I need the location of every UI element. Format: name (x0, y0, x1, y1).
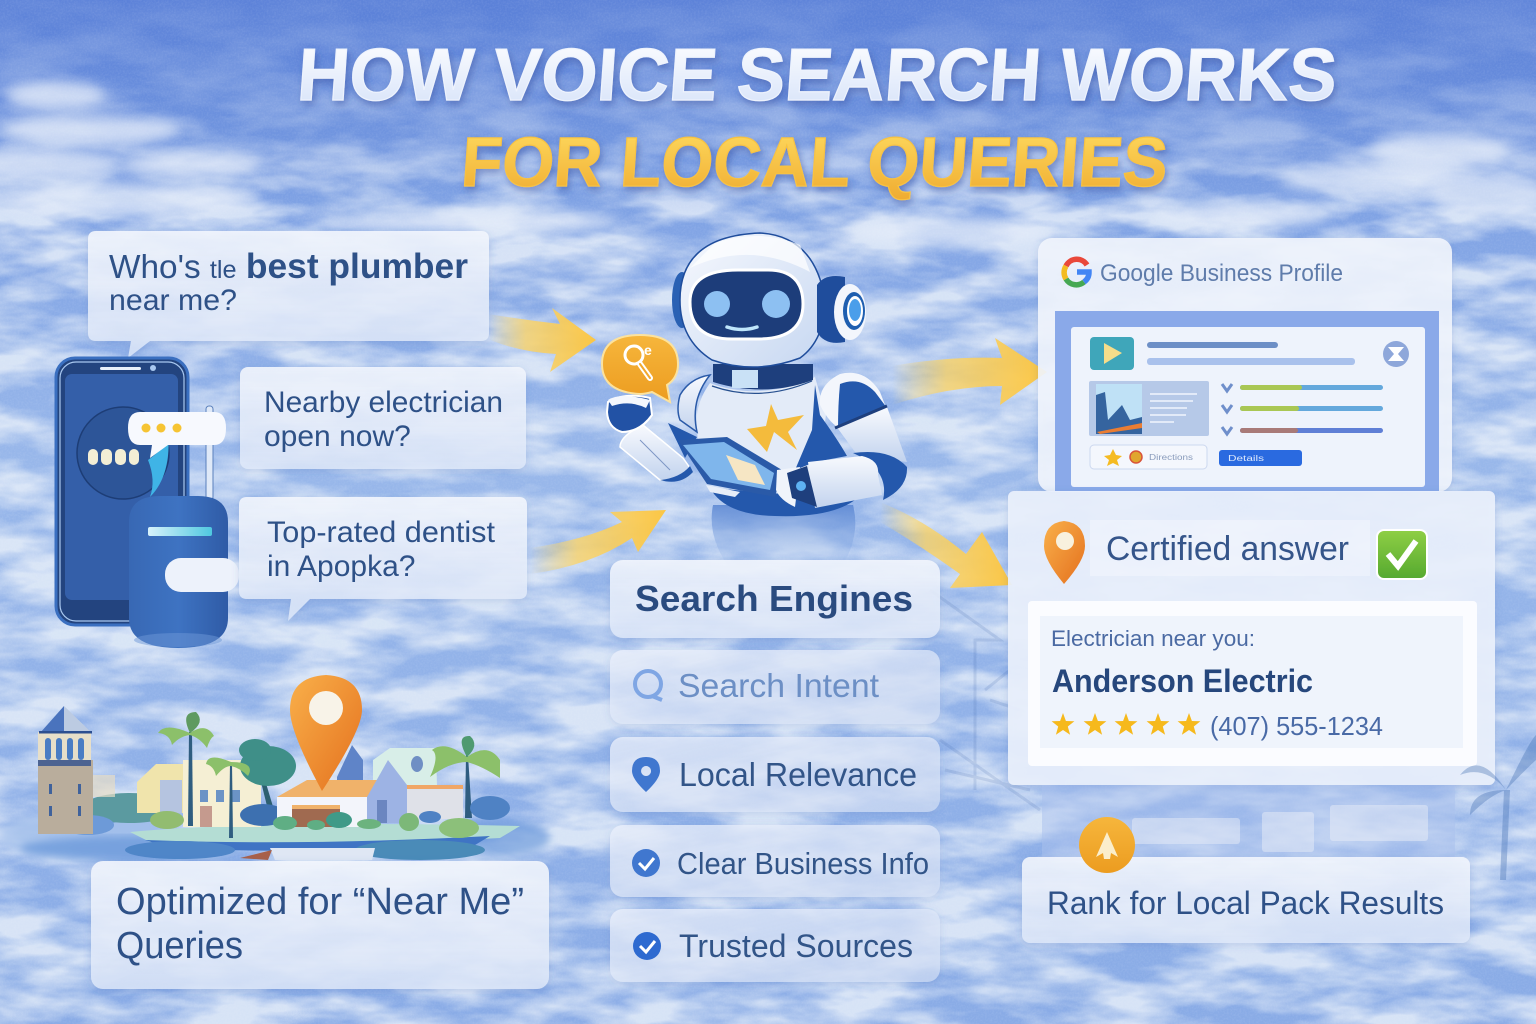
blue button: Details (1228, 454, 1264, 463)
blue button (1219, 450, 1302, 466)
optimized text: Queries (116, 925, 243, 967)
illustration: robot assistant (602, 233, 907, 575)
search intent label: Search Intent (678, 667, 879, 704)
profile inner card (1071, 327, 1425, 487)
tower (38, 706, 115, 834)
panel: certified answer (1008, 491, 1495, 785)
arrow: query to robot top (488, 308, 596, 372)
bubble 1 text line 2: near me? (109, 284, 237, 317)
robot elbow (853, 452, 907, 500)
icon: hourglass circle (1383, 341, 1409, 367)
local pack backdrop (1042, 785, 1455, 860)
optimized text: Optimized for “Near Me” (116, 881, 524, 923)
bubble 3 text: in Apopka? (267, 550, 415, 583)
icon: location pin (632, 757, 660, 792)
robot chest star (747, 404, 804, 452)
icon: orange map pin (1044, 521, 1085, 584)
robot head (680, 233, 825, 367)
arrow: robot to business profile (892, 338, 1047, 405)
panel: local relevance (610, 737, 940, 812)
rank text: Rank for Local Pack Results (1047, 885, 1444, 921)
robot left ear (672, 272, 692, 328)
arrow: robot to certified answer (880, 503, 1012, 588)
faint palm tree right (1460, 735, 1536, 880)
icon: google G (1064, 259, 1089, 285)
robot tablet (678, 437, 782, 497)
panel: google business profile (1038, 238, 1452, 492)
large orange map pin (290, 675, 362, 791)
robot wrist and hand (776, 466, 817, 507)
arrow: query to robot bottom (530, 510, 666, 574)
ground foliage (0, 793, 550, 860)
panel: optimized for near me (91, 861, 549, 989)
title line 1: HOW VOICE SEARCH WORKS (295, 33, 1340, 116)
icon: search intent (635, 671, 662, 700)
robot eyes (704, 291, 730, 317)
robot headset ring (834, 284, 866, 340)
panel: clear business info (610, 825, 940, 897)
palm trees left (150, 712, 296, 838)
icon: check (632, 849, 660, 877)
profile frame (1055, 311, 1439, 491)
trusted sources label: Trusted Sources (679, 928, 913, 964)
rating pill (1090, 445, 1207, 469)
phone number: (407) 555-1234 (1210, 711, 1383, 741)
robot blue side panel (795, 385, 847, 470)
panel: query bubble 3 (239, 497, 527, 621)
robot lower body fade (712, 505, 855, 575)
faint house behind centre (930, 590, 1040, 810)
panel: search engines heading (610, 560, 940, 638)
robot forearm (808, 456, 882, 508)
google business profile text: Google Business Profile (1100, 260, 1343, 287)
title (295, 33, 1340, 201)
checklist bars (1222, 384, 1383, 434)
speech bubble with magnifier (602, 335, 678, 402)
electrician near you text: Electrician near you: (1051, 626, 1255, 651)
robot visor (690, 270, 803, 339)
bubble 2 text: Nearby electrician (264, 386, 503, 419)
certified answer text: Certified answer (1106, 530, 1349, 568)
bubble 3 text: Top-rated dentist (267, 516, 496, 549)
bubble 2 text: open now? (264, 420, 411, 453)
local relevance label: Local Relevance (679, 756, 917, 793)
panel: query bubble 1 (88, 231, 489, 358)
robot smile (727, 327, 757, 330)
certified header highlight (1090, 520, 1370, 576)
palm tree right (430, 736, 510, 820)
robot raised hand (607, 396, 652, 432)
robot torso (697, 377, 826, 490)
header bars (1147, 342, 1355, 365)
rating pill: Directions (1149, 453, 1193, 462)
bubble 1 text line 1: Who's tle best plumber (109, 247, 468, 286)
robot right upper arm (820, 373, 907, 462)
clear business info label: Clear Business Info (677, 846, 929, 881)
robot left arm (620, 423, 697, 482)
icon: green check box (1377, 530, 1427, 579)
panel: rank for local pack (1022, 857, 1470, 943)
main house (273, 745, 479, 838)
distant buildings (137, 760, 261, 827)
robot pelvis (710, 488, 855, 516)
icon: smart speaker (129, 406, 239, 648)
illustration: town scene (0, 675, 550, 860)
robot left shoulder (678, 375, 710, 432)
thumbnail (1089, 381, 1209, 436)
robot headset (817, 276, 845, 343)
star rating (1052, 713, 1200, 735)
title line 2: FOR LOCAL QUERIES (459, 123, 1170, 201)
panel: query bubble 2 (240, 367, 526, 469)
robot neck (713, 364, 813, 390)
result card (1028, 601, 1477, 766)
panel: trusted sources (610, 909, 940, 982)
search engines label: Search Engines (635, 578, 913, 619)
speech bubble with magnifier: e (644, 342, 652, 358)
icon: typing chat bubble (128, 412, 226, 458)
icon: check (633, 932, 661, 960)
panel: search intent (610, 650, 940, 724)
icon: smartphone (56, 358, 188, 625)
icon: orange rank badge (1079, 817, 1135, 873)
icon: play tile (1090, 337, 1134, 370)
business name: Anderson Electric (1052, 663, 1313, 699)
